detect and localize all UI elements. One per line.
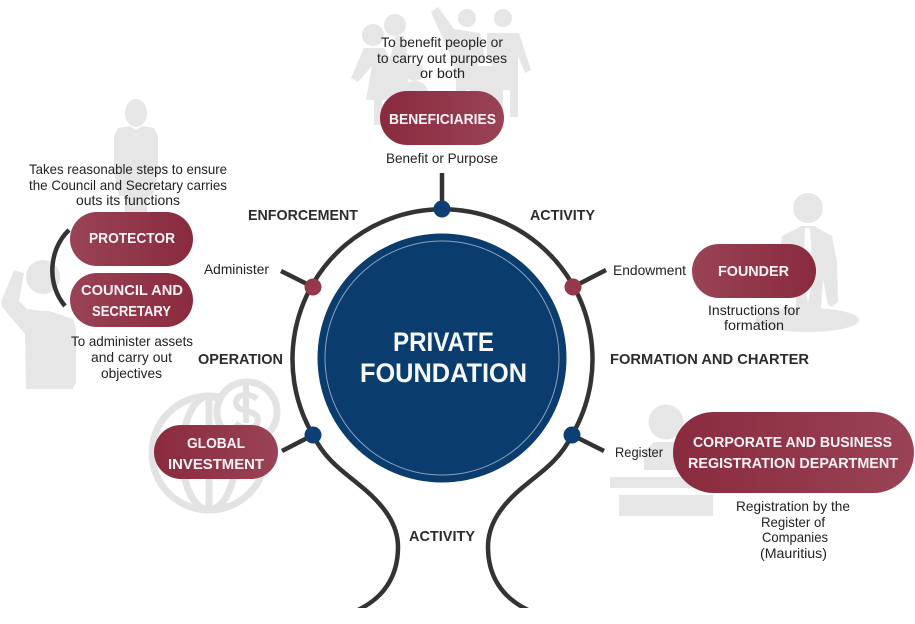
text: beneficiaries description: or both: [420, 65, 465, 81]
text: council description: [71, 333, 193, 381]
background figure: protector man: [114, 99, 158, 215]
text: council description: objectives: [101, 365, 162, 381]
pill: council and secretary: [70, 273, 193, 327]
node: enforcement: [304, 278, 322, 296]
text: protector description: Takes reasonable steps to ensure: [29, 161, 227, 177]
text: benefit or purpose: Benefit or Purpose: [386, 150, 498, 166]
background figure: beneficiaries family: [351, 7, 531, 125]
central circle: PRIVATE: [393, 327, 494, 357]
white clip below chart: [300, 608, 600, 624]
text: registration description: Register of: [761, 514, 825, 530]
text: registration description: Companies: [762, 529, 828, 545]
spokes: [52, 173, 606, 451]
heading: activity top: ACTIVITY: [530, 207, 595, 224]
label: administer: Administer: [204, 261, 269, 277]
heading: operation: OPERATION: [198, 351, 283, 368]
pill: council and secretary: COUNCIL AND: [81, 282, 183, 299]
text: protector description: the Council and Secretary carries: [29, 177, 227, 193]
text: council description: and carry out: [91, 349, 172, 365]
heading: activity bottom: ACTIVITY: [409, 528, 475, 545]
text: registration description: (Mauritius): [760, 545, 827, 561]
label: register: Register: [615, 444, 663, 460]
text: protector description: [29, 161, 227, 208]
text: founder description: [708, 302, 800, 333]
central circle: FOUNDATION: [360, 358, 527, 388]
background figure: council man with raised arm: [1, 260, 76, 389]
pill: founder: FOUNDER: [718, 263, 789, 280]
connector ring: [293, 209, 592, 610]
text: council description: To administer assets: [71, 333, 193, 349]
text: registration description: [736, 498, 850, 561]
pill: global investment: INVESTMENT: [168, 456, 264, 473]
pill: corporate and business registration department: CORPORATE AND BUSINESS: [693, 434, 892, 451]
pill: beneficiaries: BENEFICIARIES: [389, 111, 496, 128]
heading: enforcement: ENFORCEMENT: [248, 207, 358, 224]
pill: beneficiaries: [380, 91, 504, 145]
node: register: [564, 426, 580, 444]
pill: global investment: [154, 425, 278, 479]
background figure: founder man: [755, 193, 859, 332]
pill: corporate and business registration department: REGISTRATION DEPARTMENT: [688, 455, 898, 472]
node: endowment: [564, 278, 582, 296]
pill: global investment: GLOBAL: [187, 435, 245, 452]
text: beneficiaries description: to carry out purposes: [377, 50, 507, 66]
text: protector description: outs its functions: [76, 192, 180, 208]
text: registration description: Registration by the: [736, 498, 850, 514]
background figure: registrar at desk: [610, 404, 713, 516]
background icon: globe with dollar: [152, 380, 277, 510]
text: beneficiaries description: [377, 34, 507, 81]
label: endowment: Endowment: [613, 262, 686, 278]
text: beneficiaries description: To benefit people or: [381, 34, 503, 50]
pill: founder: [692, 244, 816, 298]
node: global investment: [304, 426, 322, 444]
pill: council and secretary: SECRETARY: [92, 303, 171, 320]
pill: corporate and business registration department: [673, 412, 914, 493]
pill: protector: [70, 212, 193, 266]
node: top: [434, 200, 450, 218]
text: founder description: formation: [724, 317, 784, 333]
pill: protector: PROTECTOR: [89, 230, 175, 247]
central circle: [318, 234, 566, 482]
heading: formation and charter: FORMATION AND CHARTER: [610, 351, 809, 368]
text: founder description: Instructions for: [708, 302, 800, 318]
